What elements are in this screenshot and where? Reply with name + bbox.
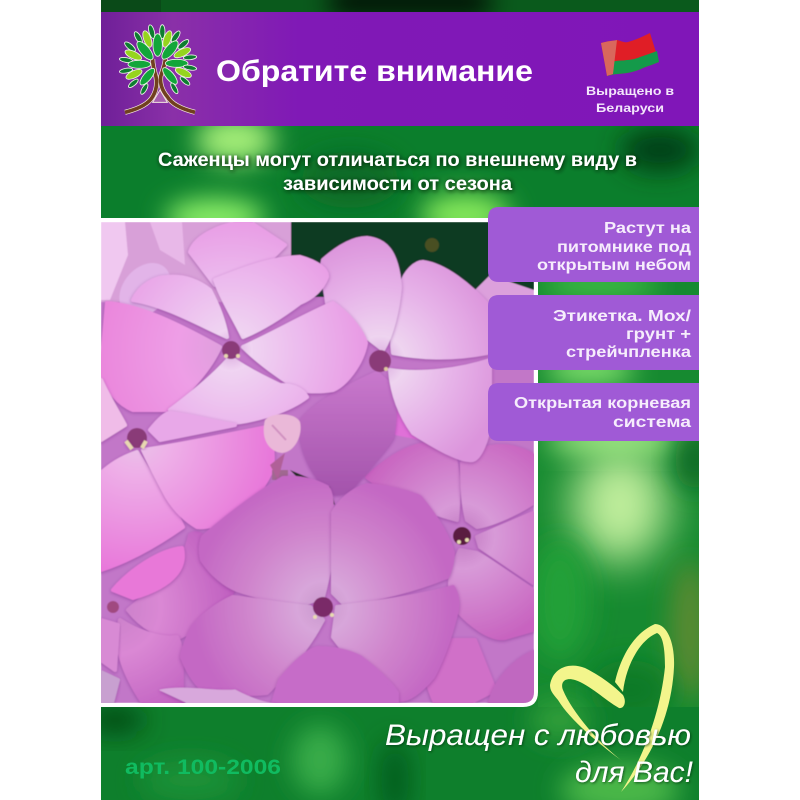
panel: open field xyxy=(488,207,699,282)
panel: open root system: система xyxy=(613,414,691,431)
icon: heart xyxy=(550,624,674,792)
subheading: зависимости от сезона xyxy=(283,174,512,195)
tagline xyxy=(386,723,694,785)
panel: open root system: Открытая корневая xyxy=(514,395,691,412)
top banner xyxy=(101,12,699,126)
green band background xyxy=(153,126,699,218)
flag caption: Выращено в xyxy=(586,84,674,98)
panel: open root system xyxy=(488,383,699,441)
flag caption xyxy=(586,86,674,114)
subheading xyxy=(158,150,637,195)
photo frame xyxy=(101,218,538,707)
flower 1 upper left xyxy=(101,222,366,423)
flag caption: Беларуси xyxy=(596,101,664,115)
subheading: Саженцы могут отличаться по внешнему виду в xyxy=(158,150,637,171)
right column bokeh background xyxy=(538,282,699,707)
footer green background xyxy=(85,700,699,800)
flower photo xyxy=(101,222,534,704)
flower 3 left xyxy=(101,380,273,570)
flower 6 bottom left xyxy=(101,533,233,703)
icon: tree logo xyxy=(119,24,197,112)
panel: label and packaging: стрейчпленка xyxy=(566,344,691,361)
panel: label and packaging: грунт + xyxy=(626,326,691,343)
title: Обратите внимание xyxy=(216,55,533,88)
icon: flag of Belarus xyxy=(601,33,659,76)
bud xyxy=(264,414,301,480)
flower 5 right xyxy=(367,444,534,703)
panel: label and packaging xyxy=(488,295,699,370)
background blossoms, top left xyxy=(101,222,292,312)
flower 4 bottom center xyxy=(160,478,458,704)
panel: label and packaging: Этикетка. Мох/ xyxy=(553,308,692,325)
background blossom, right xyxy=(475,275,534,302)
flower 2 upper right xyxy=(301,238,490,493)
tagline: для Вас! xyxy=(575,756,694,789)
panel: open field: питомнике под xyxy=(557,239,691,256)
poster background xyxy=(85,0,715,800)
panel: open field: Растут на xyxy=(604,220,691,237)
top strip xyxy=(101,0,699,12)
poster xyxy=(101,0,699,800)
article number: арт. 100-2006 xyxy=(125,756,281,779)
panel: open field: открытым небом xyxy=(537,257,691,274)
tagline: Выращен с любовью xyxy=(385,719,691,752)
